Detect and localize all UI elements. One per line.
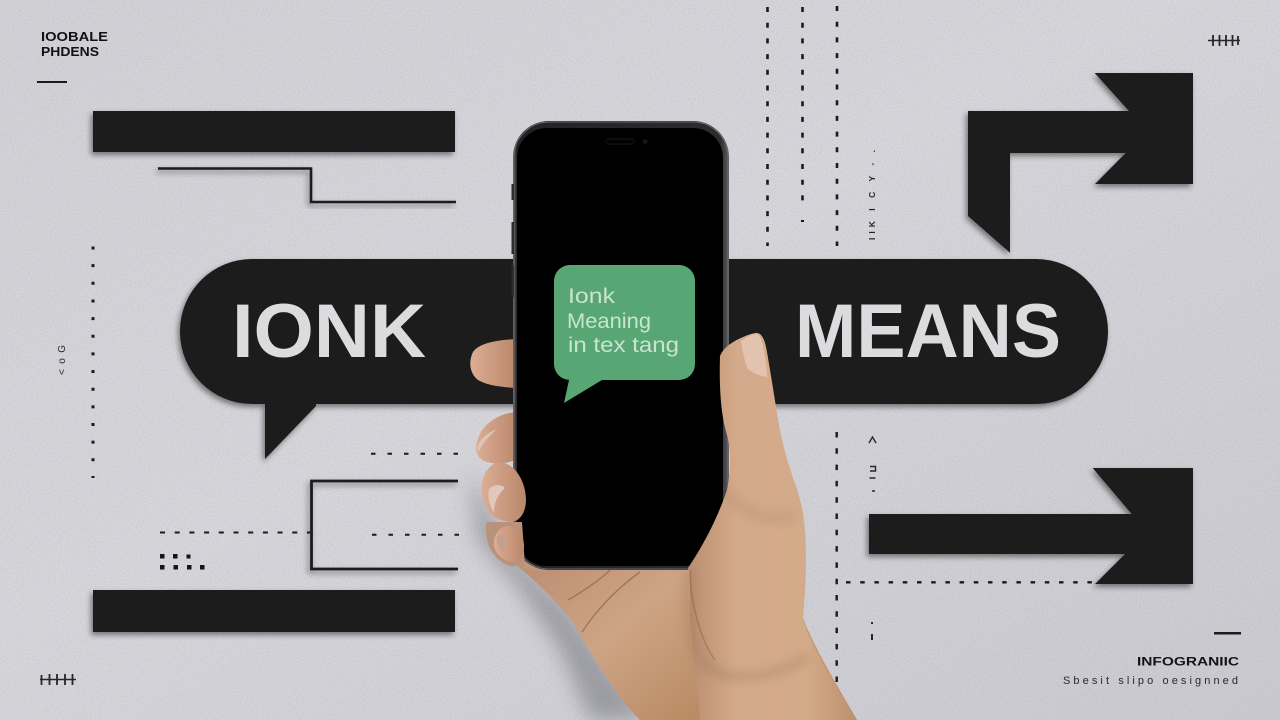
hand: palm and wrist behind phone xyxy=(500,480,857,720)
hand: palm over phone corner and thumb xyxy=(510,333,857,720)
bottom-right caption subtitle: Sbesit slipo oesignned xyxy=(1063,675,1238,687)
palm creases xyxy=(568,492,807,677)
dotted vertical line left xyxy=(92,246,94,478)
bubble text line 3: in tex tang xyxy=(568,334,679,357)
fingers in front of phone edge xyxy=(482,462,526,566)
small vertical micro text top-right: IIK I C Y - . xyxy=(867,150,877,240)
speech pill with tail xyxy=(180,259,1108,459)
black bar top-left xyxy=(93,111,455,152)
tick mark top-right xyxy=(1208,35,1240,46)
dot grid xyxy=(160,554,204,570)
pill word: IONK: IONK xyxy=(232,289,426,374)
short rule bottom-right xyxy=(1214,632,1241,634)
small marks lower-right xyxy=(869,437,876,640)
dotted vertical lines top-centre xyxy=(768,6,837,246)
bubble text line 1: Ionk xyxy=(568,284,615,308)
dashed lines lower-left xyxy=(371,454,460,535)
top-left heading label xyxy=(41,30,108,59)
hand shadow xyxy=(470,470,650,720)
top-left heading label: IOOBALE xyxy=(41,30,108,44)
small vertical micro text left: < o G xyxy=(57,345,68,375)
arrow: lower-right straight arrow xyxy=(869,468,1193,584)
top-left heading label: PHDENS xyxy=(41,45,99,59)
chat bubble on phone screen xyxy=(554,265,695,403)
bottom-right caption title: INFOGRANIIC xyxy=(1137,656,1239,668)
black bar bottom-left xyxy=(93,590,455,632)
fingers behind phone xyxy=(470,339,518,463)
dashed vertical line lower-right xyxy=(836,432,838,682)
bubble text line 2: Meaning xyxy=(567,310,651,333)
thumbnail xyxy=(741,334,767,377)
phone xyxy=(512,121,729,570)
short rule top-left xyxy=(37,81,67,83)
tick mark bottom-left xyxy=(40,674,76,685)
open rectangle outline xyxy=(312,481,458,569)
dashed horizontal line lower-right xyxy=(846,581,1094,583)
pill word: MEANS: MEANS xyxy=(795,289,1061,374)
arrow: top-right bent arrow xyxy=(968,73,1193,253)
stepped line top-left xyxy=(158,168,456,202)
